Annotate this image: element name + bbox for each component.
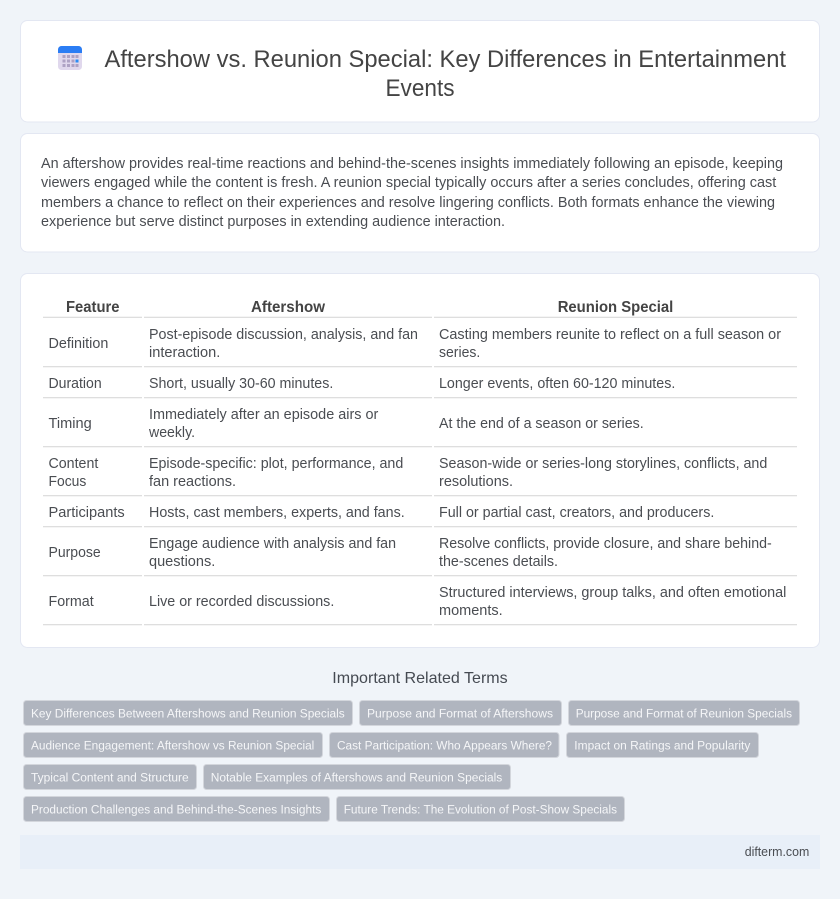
- icon: calendar: [58, 46, 82, 70]
- tag: Future Trends: The Evolution of Post-Show Specials: [344, 802, 617, 816]
- tag: Production Challenges and Behind-the-Scenes Insights: [31, 802, 321, 816]
- row: content focus: Focus: [48, 474, 86, 490]
- tag: Key Differences Between Aftershows and Reunion Specials: [31, 706, 345, 720]
- row: duration: Duration: [48, 376, 102, 392]
- row: definition: [48, 327, 781, 361]
- row: participants: [48, 505, 714, 521]
- row: purpose: questions.: [149, 554, 215, 570]
- row: content focus: Content: [48, 456, 98, 472]
- footer: [20, 835, 820, 869]
- row: purpose: Purpose: [48, 545, 101, 561]
- tag: [360, 700, 562, 726]
- row: timing: Timing: [48, 416, 92, 432]
- row: timing: At the end of a season or series.: [439, 416, 644, 432]
- tag: Typical Content and Structure: [31, 770, 189, 784]
- title: Events: [386, 75, 454, 102]
- row: definition: Definition: [48, 336, 108, 352]
- row: content focus: fan reactions.: [149, 474, 236, 490]
- row: definition: Casting members reunite to reflect on a full season or: [439, 327, 781, 343]
- row: purpose: Resolve conflicts, provide closure, and share behind-: [439, 536, 772, 552]
- row: participants: Hosts, cast members, experts, and fans.: [149, 505, 405, 521]
- row: timing: Immediately after an episode airs or: [149, 407, 379, 423]
- row: content focus: Season-wide or series-long storylines, conflicts, and: [439, 456, 767, 472]
- intro text: An aftershow provides real-time reactions and behind-the-scenes insights immediately following an episode, keeping: [41, 156, 783, 172]
- row: format: moments.: [439, 603, 503, 619]
- row: participants: Full or partial cast, creators, and producers.: [439, 505, 714, 521]
- panel: comparison table: [20, 274, 820, 648]
- tag: [24, 764, 196, 790]
- tag: [568, 700, 800, 726]
- row: format: Structured interviews, group talks, and often emotional: [439, 585, 786, 601]
- row: duration: Longer events, often 60-120 minutes.: [439, 376, 675, 392]
- tag: [24, 700, 352, 726]
- tag: [24, 796, 330, 822]
- tag: [204, 764, 510, 790]
- row: definition: interaction.: [149, 345, 220, 361]
- row: purpose: Engage audience with analysis and fan: [149, 536, 396, 552]
- row: participants: Participants: [48, 505, 125, 521]
- row: definition: series.: [439, 345, 480, 361]
- table header: Feature: [66, 299, 120, 316]
- title: [104, 46, 786, 102]
- tag: Audience Engagement: Aftershow vs Reunion Special: [31, 738, 314, 752]
- title: Aftershow vs. Reunion Special: Key Differences in Entertainment: [104, 46, 786, 73]
- intro text: members a chance to reflect on their experiences and resolve lingering conflicts. Both formats enhance the viewing: [41, 195, 775, 211]
- row: format: Format: [48, 594, 94, 610]
- row: format: Live or recorded discussions.: [149, 594, 334, 610]
- heading: important related terms: Important Related Terms: [332, 670, 508, 687]
- intro text: experience but serve distinct purposes in extending audience interaction.: [41, 214, 505, 230]
- tag: Purpose and Format of Reunion Specials: [576, 706, 792, 720]
- footer: difterm.com: [745, 844, 809, 859]
- row: duration: [48, 376, 675, 392]
- tag: Purpose and Format of Aftershows: [367, 706, 553, 720]
- table header: Reunion Special: [558, 299, 673, 316]
- tag: [336, 796, 624, 822]
- row: timing: [48, 407, 644, 441]
- row: duration: Short, usually 30-60 minutes.: [149, 376, 333, 392]
- table header: Aftershow: [251, 299, 326, 316]
- tag: [566, 732, 758, 758]
- row: format: [48, 585, 786, 619]
- table header: [66, 299, 673, 316]
- intro text: [41, 156, 783, 230]
- tag: [24, 732, 322, 758]
- intro text: viewers engaged while the content is fresh. A reunion special typically occurs after a series concludes, offering cast: [41, 175, 776, 191]
- tag: Cast Participation: Who Appears Where?: [337, 738, 552, 752]
- row: definition: Post-episode discussion, analysis, and fan: [149, 327, 418, 343]
- row: purpose: [48, 536, 772, 570]
- tag: Impact on Ratings and Popularity: [574, 738, 751, 752]
- panel: title header: [20, 20, 820, 122]
- related term tags: [24, 700, 800, 822]
- row: content focus: [48, 456, 767, 490]
- row: content focus: Episode-specific: plot, performance, and: [149, 456, 403, 472]
- tag: [330, 732, 559, 758]
- row: content focus: resolutions.: [439, 474, 513, 490]
- row: timing: weekly.: [148, 425, 195, 441]
- row: purpose: the-scenes details.: [439, 554, 558, 570]
- panel: introduction: [20, 134, 820, 252]
- tag: Notable Examples of Aftershows and Reunion Specials: [211, 770, 502, 784]
